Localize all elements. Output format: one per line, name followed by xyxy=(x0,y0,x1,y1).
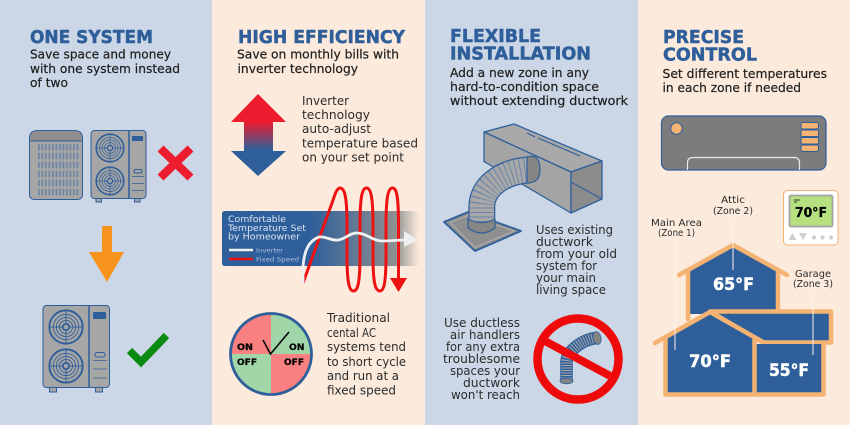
text: one system description: Save space and money xyxy=(30,48,171,62)
label: attic zone 2: Attic xyxy=(721,195,745,206)
text: existing ductwork note xyxy=(536,223,617,297)
text: high efficiency description xyxy=(237,48,399,76)
band label: Comfortable xyxy=(228,215,286,225)
text: traditional central ac note: Traditional xyxy=(326,311,390,325)
text: inverter note: Inverter xyxy=(302,94,349,108)
icon: on off timer: ON xyxy=(237,343,253,353)
heading: flexible installation: FLEXIBLE xyxy=(450,27,541,47)
text: one system description: of two xyxy=(30,76,68,90)
legend xyxy=(229,248,299,264)
house outline xyxy=(655,245,824,394)
text: existing ductwork note: from your old xyxy=(536,247,617,261)
panel: precise control xyxy=(638,0,850,425)
band label: by Homeowner xyxy=(228,232,301,242)
text: flexible installation description: Add a new zone in any xyxy=(450,66,589,80)
text: inverter note: technology xyxy=(302,108,370,122)
text: traditional central ac note: systems tend xyxy=(327,340,406,354)
icon: on off timer: OFF xyxy=(284,358,304,368)
icon: on off timer: OFF xyxy=(237,358,257,368)
main zone xyxy=(666,313,755,394)
icon: on off timer: ON xyxy=(289,343,304,353)
icon: thermostat xyxy=(784,190,838,245)
zone leader lines xyxy=(675,220,813,355)
text: inverter note: on your set point xyxy=(302,150,404,164)
zone temperatures xyxy=(689,275,809,381)
legend: Inverter xyxy=(256,248,284,254)
text: traditional central ac note xyxy=(326,311,406,398)
text: high efficiency description: inverter technology xyxy=(238,62,358,76)
icon: thermostat: 70°F xyxy=(795,206,827,221)
text: ductless air handlers note: for any extra xyxy=(446,340,520,354)
label: garage zone 3: (Zone 3) xyxy=(793,279,833,290)
text: ductless air handlers note: air handlers xyxy=(450,328,520,342)
icon: on off timer xyxy=(230,314,312,394)
label: main area zone 1 xyxy=(651,218,702,239)
icon: up and down arrow xyxy=(231,94,286,176)
text: existing ductwork note: system for xyxy=(536,259,597,273)
icon: old condenser unit xyxy=(30,130,82,200)
label: attic zone 2 xyxy=(713,195,753,217)
heading: precise control: CONTROL xyxy=(663,46,757,66)
zone temperatures: 70°F xyxy=(689,352,731,372)
fixed speed line xyxy=(303,188,407,292)
icon: single outdoor unit xyxy=(43,306,110,392)
text: ductless air handlers note xyxy=(443,316,520,402)
garage zone xyxy=(756,344,823,394)
heading: precise control: PRECISE xyxy=(663,28,744,48)
text: flexible installation description: without extending ductwork xyxy=(450,94,628,108)
label: garage zone 3: Garage xyxy=(795,269,831,280)
band label: Temperature Set xyxy=(227,224,307,234)
legend: Fixed Speed xyxy=(256,256,299,264)
text: one system description: with one system instead xyxy=(30,62,180,76)
icon: no duct sign xyxy=(538,318,618,400)
text: ductless air handlers note: ductwork xyxy=(463,376,520,390)
label: main area zone 1: (Zone 1) xyxy=(658,228,695,239)
text: traditional central ac note: and run at a xyxy=(327,369,399,383)
panel: high efficiency xyxy=(212,0,425,425)
icon: red cross xyxy=(160,148,190,178)
band label xyxy=(227,215,307,242)
text: existing ductwork note: your main xyxy=(536,271,596,285)
text: inverter note: temperature based xyxy=(302,136,418,150)
text: ductless air handlers note: won't reach xyxy=(451,388,520,402)
text: existing ductwork note: Uses existing xyxy=(536,223,613,237)
text: existing ductwork note: living space xyxy=(536,283,606,297)
text: ductless air handlers note: spaces your xyxy=(450,364,520,378)
upper zone xyxy=(688,247,778,314)
arrow: orange down xyxy=(89,226,124,282)
heading: flexible installation: INSTALLATION xyxy=(450,44,591,64)
text: precise control description: Set different temperatures xyxy=(662,67,827,81)
text: flexible installation description: hard-to-condition space xyxy=(450,80,599,94)
icon: wall air handler xyxy=(662,116,826,170)
icon: green check xyxy=(130,336,166,362)
middle roof section xyxy=(710,312,831,342)
heading: high efficiency: HIGH EFFICIENCY xyxy=(238,28,405,48)
label: main area zone 1: Main Area xyxy=(651,218,702,229)
text: one system description xyxy=(30,48,180,90)
heading: one system: ONE SYSTEM xyxy=(30,28,153,48)
text: inverter note xyxy=(302,94,418,164)
diagram: house zones xyxy=(655,220,831,394)
panel: flexible installation xyxy=(425,0,638,425)
heading: precise control xyxy=(663,28,757,66)
label: garage zone 3 xyxy=(793,269,833,290)
text: traditional central ac note: cental AC xyxy=(327,326,376,340)
heading: flexible installation xyxy=(450,27,591,64)
text: traditional central ac note: to short cycle xyxy=(327,355,406,369)
text: existing ductwork note: ductwork xyxy=(536,235,593,249)
label: attic zone 2: (Zone 2) xyxy=(713,206,753,217)
icon: duct with flexible elbow xyxy=(444,124,602,251)
text: traditional central ac note: fixed speed xyxy=(327,384,396,398)
text: high efficiency description: Save on monthly bills with xyxy=(237,48,399,62)
zone temperatures: 65°F xyxy=(713,275,754,295)
icon: small outdoor unit xyxy=(91,130,146,202)
text: precise control description xyxy=(662,67,827,95)
text: ductless air handlers note: Use ductless xyxy=(444,316,520,330)
panel: one system xyxy=(0,0,212,425)
chart: inverter versus fixed speed xyxy=(222,188,419,292)
text: ductless air handlers note: troublesome xyxy=(443,352,520,366)
inverter line xyxy=(303,231,418,283)
text: flexible installation description xyxy=(450,66,628,108)
comfort band xyxy=(222,211,419,266)
text: inverter note: auto-adjust xyxy=(302,122,371,136)
zone temperatures: 55°F xyxy=(769,361,809,381)
text: precise control description: in each zone if needed xyxy=(662,81,801,95)
